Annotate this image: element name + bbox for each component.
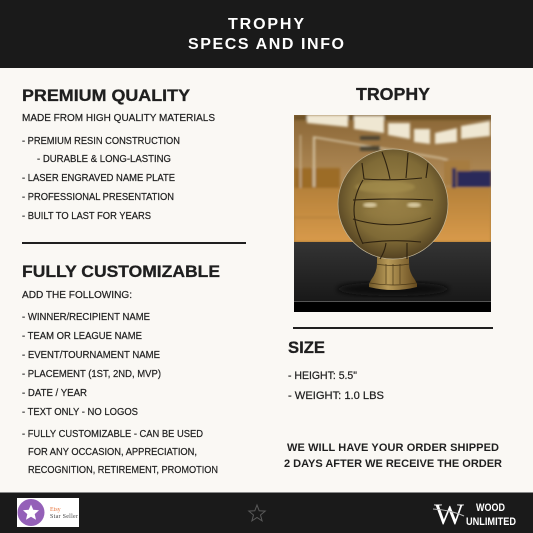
header title: TROPHY — [228, 16, 304, 33]
badge: etsy star seller — [17, 498, 79, 527]
customization list: - TEAM OR LEAGUE NAME — [22, 330, 142, 342]
feature list: - LASER ENGRAVED NAME PLATE — [22, 172, 175, 184]
feature list: - PREMIUM RESIN CONSTRUCTION — [22, 135, 180, 147]
customization list — [22, 289, 161, 418]
heading: trophy: TROPHY — [356, 84, 430, 104]
customization list: ADD THE FOLLOWING: — [22, 289, 132, 301]
customization list: - WINNER/RECIPIENT NAME — [22, 311, 150, 323]
feature list: - BUILT TO LAST FOR YEARS — [22, 210, 151, 222]
logo: wood unlimited: W — [434, 498, 465, 531]
shipping note — [284, 442, 502, 470]
customization note — [22, 428, 218, 476]
logo: wood unlimited: WOOD — [476, 502, 505, 514]
icon: star outline — [249, 505, 265, 521]
header title — [188, 16, 344, 53]
badge: etsy star seller: Star Seller — [50, 514, 78, 520]
heading: size: SIZE — [288, 338, 325, 357]
customization note: FOR ANY OCCASION, APPRECIATION, — [28, 446, 197, 458]
feature list — [22, 112, 215, 222]
heading: premium quality: PREMIUM QUALITY — [22, 86, 191, 105]
feature list: - PROFESSIONAL PRESENTATION — [22, 191, 174, 203]
panel: fully customizable — [22, 262, 220, 476]
heading: fully customizable: FULLY CUSTOMIZABLE — [22, 262, 220, 281]
footer band — [0, 492, 533, 533]
size specs — [288, 370, 384, 402]
size specs: - HEIGHT: 5.5" — [288, 370, 357, 382]
customization list: - DATE / YEAR — [22, 387, 87, 399]
header band — [0, 0, 533, 68]
size specs: - WEIGHT: 1.0 LBS — [288, 390, 384, 402]
logo: wood unlimited: UNLIMITED — [466, 516, 516, 528]
customization note: - FULLY CUSTOMIZABLE - CAN BE USED — [22, 428, 203, 440]
customization list: - TEXT ONLY - NO LOGOS — [22, 406, 138, 418]
badge: etsy star seller: Etsy — [50, 507, 61, 513]
photo: volleyball trophy — [294, 115, 491, 312]
feature list: - DURABLE & LONG-LASTING — [37, 153, 171, 165]
panel: premium quality — [22, 86, 215, 222]
logo: wood unlimited — [433, 498, 516, 531]
customization note: RECOGNITION, RETIREMENT, PROMOTION — [28, 464, 218, 476]
customization list: - PLACEMENT (1ST, 2ND, MVP) — [22, 368, 161, 380]
shipping note: 2 DAYS AFTER WE RECEIVE THE ORDER — [284, 458, 502, 470]
shipping note: WE WILL HAVE YOUR ORDER SHIPPED — [287, 442, 499, 454]
header title: SPECS AND INFO — [188, 36, 344, 53]
customization list: - EVENT/TOURNAMENT NAME — [22, 349, 160, 361]
feature list: MADE FROM HIGH QUALITY MATERIALS — [22, 112, 215, 124]
icon: gold volleyball — [338, 149, 448, 290]
panel: size — [288, 338, 384, 402]
